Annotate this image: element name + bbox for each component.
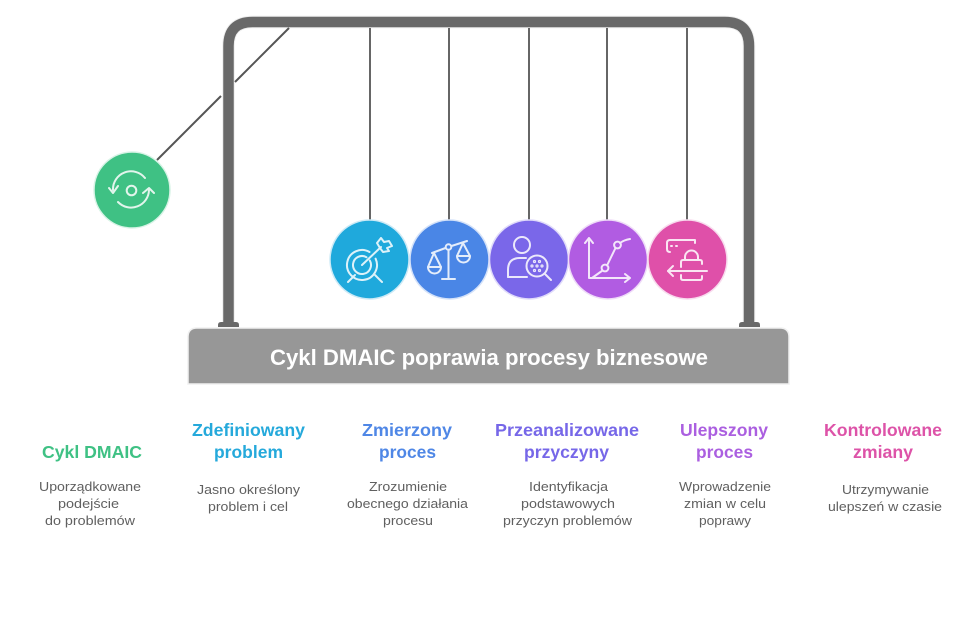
heading <box>362 420 452 462</box>
description: przyczyn problemów <box>503 513 633 528</box>
heading: Zmierzony <box>362 420 452 440</box>
description <box>828 482 942 514</box>
ball: scales (indigo blue) <box>410 220 489 299</box>
base panel <box>188 328 789 384</box>
ball: control (pink) <box>648 220 727 299</box>
heading: przyczyny <box>524 442 609 462</box>
description: do problemów <box>45 513 136 528</box>
column: Zdefiniowany problem <box>192 420 305 514</box>
description: problem i cel <box>208 499 288 514</box>
heading: problem <box>214 442 283 462</box>
description: podstawowych <box>521 496 615 511</box>
column: Przeanalizowane przyczyny <box>495 420 639 528</box>
ball: cycle (green) <box>94 152 170 228</box>
description <box>39 479 141 528</box>
icon: cycle arrows <box>109 171 154 208</box>
icon: lock with arrow <box>667 240 707 280</box>
ball: analysis (violet) <box>490 220 568 299</box>
icon: target with arrow <box>347 238 392 282</box>
description: obecnego działania <box>347 496 469 511</box>
description: podejście <box>58 496 119 511</box>
description: poprawy <box>699 513 752 528</box>
description: Uporządkowane <box>39 479 141 494</box>
description: procesu <box>383 513 433 528</box>
description: Zrozumienie <box>369 479 447 494</box>
description: ulepszeń w czasie <box>828 499 942 514</box>
ball: chart (purple) <box>568 220 648 299</box>
heading <box>824 420 942 462</box>
icon: person with magnifier <box>508 237 551 280</box>
heading <box>680 420 768 462</box>
base title: Cykl DMAIC poprawia procesy biznesowe <box>270 345 708 370</box>
heading <box>192 420 305 462</box>
icon: balance scales <box>428 241 470 279</box>
column: Ulepszony proces <box>679 420 771 528</box>
heading: Kontrolowane <box>824 420 942 440</box>
heading: proces <box>379 442 436 462</box>
heading: proces <box>696 442 753 462</box>
description: Jasno określony <box>197 482 301 497</box>
column: Zmierzony proces <box>347 420 469 528</box>
heading: Przeanalizowane <box>495 420 639 440</box>
column: Kontrolowane zmiany <box>824 420 942 514</box>
description <box>347 479 469 528</box>
description <box>197 482 301 514</box>
heading: Ulepszony <box>680 420 768 440</box>
column: Cykl DMAIC <box>39 442 142 528</box>
description: Utrzymywanie <box>842 482 929 497</box>
description: Identyfikacja <box>529 479 609 494</box>
icon: rising line chart <box>585 238 630 282</box>
heading: Zdefiniowany <box>192 420 305 440</box>
description <box>679 479 771 528</box>
heading: Cykl DMAIC <box>42 442 142 462</box>
description <box>503 479 633 528</box>
description: zmian w celu <box>684 496 766 511</box>
pendulum strings <box>157 28 687 221</box>
heading: zmiany <box>853 442 913 462</box>
heading <box>495 420 639 462</box>
ball: target (blue) <box>330 220 409 299</box>
frame: cradle <box>218 22 760 327</box>
description: Wprowadzenie <box>679 479 771 494</box>
